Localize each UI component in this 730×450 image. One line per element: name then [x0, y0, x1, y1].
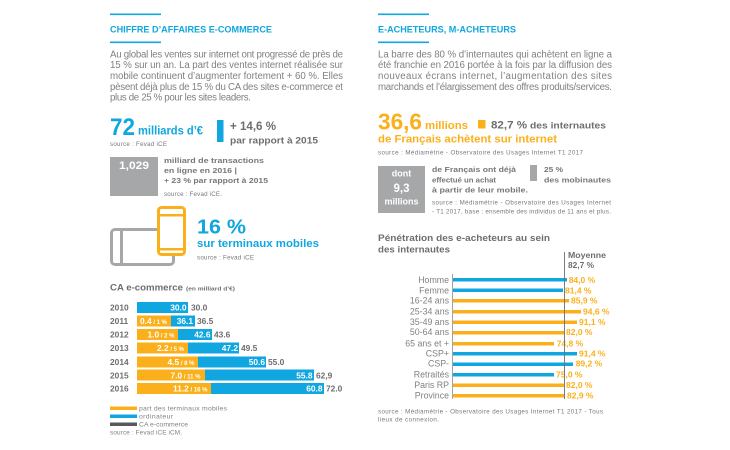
row CSP-: 89,2 % [576, 358, 603, 368]
row 2013: 49.5 [241, 343, 258, 353]
row 2011: 36.5 [197, 316, 214, 326]
stat: 16 % mobiles [197, 216, 319, 262]
row CSP+: 91,4 % [579, 348, 606, 358]
row CSP-: CSP- [428, 358, 449, 368]
row Paris RP: 82,0 % [566, 380, 593, 390]
icon: tablet and phone [112, 208, 185, 264]
stat: 72 milliards: source : Fevad iCE [110, 141, 167, 148]
row 2015: 62,9 [316, 370, 333, 380]
text: mobile buyers: - T1 2017, base : ensemble des individus de 11 ans et plus. [432, 208, 611, 216]
row 16-24 ans [410, 296, 598, 306]
intro text: La barre des 80 % d’internautes qui achètent en ligne a [378, 50, 613, 60]
stat: 16 % mobiles: sur terminaux mobiles [197, 238, 319, 250]
stat: growth 14,6 %: par rapport à 2015 [230, 136, 319, 146]
legend: source : Fevad iCE iCM. [110, 430, 182, 436]
row 2014: 55.0 [268, 357, 285, 367]
row 25-34 ans [410, 306, 610, 316]
row Retraités: 75,0 % [556, 370, 583, 380]
legend: ordinateur [139, 414, 174, 420]
chart title: CA e-commerce: CA e-commerce [110, 282, 183, 294]
row 2015: 7.0 / 11 % [170, 370, 201, 380]
row 2012: 42.6 [194, 330, 211, 340]
row Femme: Femme [419, 286, 449, 296]
row Province: Province [415, 390, 449, 400]
source note: source : Médiamétrie - Observatoire des Usages Internet T1 2017 - Tous [378, 408, 603, 416]
legend: part des terminaux mobiles [139, 406, 228, 412]
row Homme: Homme [418, 275, 449, 285]
intro text: marchands et l’élargissement des offres produits/services. [378, 82, 612, 93]
stat: 72 milliards [110, 114, 204, 148]
row 35-49 ans [410, 317, 606, 327]
row 2014: 2014 [110, 357, 129, 367]
row 2015: 2015 [110, 370, 129, 380]
row 50-64 ans: 50-64 ans [410, 327, 450, 337]
stat: dont 9,3 millions: millions [384, 196, 419, 206]
row Paris RP: Paris RP [414, 380, 449, 390]
stat: 72 milliards: milliards d’€ [138, 126, 204, 138]
stat: growth 14,6 % [217, 120, 319, 146]
row 2012: 43.6 [214, 330, 231, 340]
row 2016 [110, 383, 343, 394]
stat: 16 % mobiles: 16 % [197, 216, 246, 238]
row 2011: 2011 [110, 316, 129, 326]
row Province: 82,9 % [567, 390, 594, 400]
row CSP+ [426, 348, 606, 358]
row Homme: 84,0 % [569, 275, 596, 285]
row Retraités: Retraités [414, 370, 450, 380]
intro text: nouveaux écrans internet, l’augmentation des sites [378, 71, 612, 82]
stat: transactions: + 23 % par rapport à 2015 [164, 176, 269, 185]
stat: transactions: en ligne en 2016 | [164, 166, 237, 175]
bar chart: pénétration des e-acheteurs [405, 274, 610, 400]
row 2014: 4.5 / 8 % [168, 357, 195, 367]
chart title: pénétration: des internautes [378, 244, 450, 256]
row 35-49 ans: 91,1 % [579, 317, 606, 327]
legend [110, 406, 228, 436]
intro text [378, 50, 613, 93]
stat: 16 % mobiles: source : Fevad iCE [197, 254, 254, 262]
stat: 82,7 % des internautes: des internautes [530, 120, 606, 132]
stat: 25 % mobinautes: des mobinautes [544, 176, 611, 184]
stat: 72 milliards: 72 [110, 114, 135, 141]
intro text [110, 50, 344, 104]
chart title: pénétration: Pénétration des e-acheteurs au sein [378, 233, 550, 244]
row 2013: 2.2 / 5 % [157, 343, 185, 353]
chart title: CA e-commerce: (en milliard d’€) [186, 286, 235, 292]
stat: dont 9,3 millions [378, 166, 425, 213]
average marker: moyenne 82,7 %: Moyenne [568, 251, 607, 260]
average marker: moyenne 82,7 % [564, 251, 607, 399]
row 2013: 2013 [110, 343, 129, 353]
row 65 ans et +: 74,8 % [557, 338, 584, 348]
stat: 82,7 % des internautes [478, 120, 606, 132]
stat: transactions: milliard de transactions [164, 156, 264, 165]
row 2013: 47.2 [222, 343, 238, 353]
row 35-49 ans: 35-49 ans [410, 317, 450, 327]
stat: 36,6 millions: 36,6 [378, 108, 422, 134]
row CSP+: CSP+ [426, 348, 449, 358]
row Province [415, 390, 594, 400]
row 2012: 2012 [110, 330, 129, 340]
row 2015: 55.8 [296, 370, 313, 380]
row 25-34 ans: 25-34 ans [410, 306, 450, 316]
row 2014: 50.6 [249, 357, 265, 367]
row 16-24 ans: 16-24 ans [410, 296, 450, 306]
row Paris RP [414, 380, 593, 390]
row 2012: 1.0 / 2 % [148, 330, 175, 340]
row 2016: 60.8 [306, 384, 323, 394]
stat: growth 14,6 %: + 14,6 % [230, 121, 276, 133]
row 50-64 ans [410, 327, 593, 337]
row 2010: 2010 [110, 302, 129, 312]
row 2016: 2016 [110, 384, 129, 394]
source note: lieux de connexion. [378, 416, 439, 424]
intro text: plus de 25 % pour les sites leaders. [110, 92, 251, 104]
intro text: pèsent déjà plus de 15 % du CA des sites e-commerce et [110, 82, 343, 93]
stat: 82,7 % des internautes: 82,7 % [491, 120, 527, 132]
chart title: CA e-commerce [110, 282, 235, 294]
row 25-34 ans: 94,6 % [583, 306, 610, 316]
stat: transactions: source : Fevad iCE. [164, 191, 222, 198]
stat: 36,6 millions: source : Médiamétrie - Observatoire des Usages Internet T1 2017 [378, 150, 584, 156]
stat: 25 % mobinautes: 25 % [544, 165, 563, 174]
stat: 25 % mobinautes [530, 165, 611, 184]
intro text: été franchie en 2016 portée à la fois par la diffusion des [378, 60, 612, 71]
row Femme [419, 286, 592, 296]
row 65 ans et +: 65 ans et + [405, 338, 449, 348]
row Femme: 81,4 % [565, 286, 592, 296]
source note [378, 408, 603, 424]
text: mobile buyers: de Français ont déjà [432, 165, 517, 174]
row 2010: 30.0 [191, 302, 208, 312]
row 2011 [110, 316, 214, 326]
row 50-64 ans: 82,0 % [566, 327, 593, 337]
stat: transactions: 1,029 [119, 160, 149, 172]
row 2014 [110, 356, 285, 368]
row Homme [418, 275, 596, 285]
intro text: Au global les ventes sur internet ont progressé de près de [110, 50, 343, 60]
heading: chiffre d'affaires: CHIFFRE D’AFFAIRES E-COMMERCE [110, 24, 273, 36]
row Retraités [414, 370, 583, 380]
heading: e-acheteurs [378, 14, 517, 43]
intro text: 15 % sur un an. La part des ventes internet réalisée sur [110, 60, 344, 71]
row 2010 [110, 302, 208, 313]
row 2011: 0.4 / 1 % [140, 316, 168, 326]
row 2010: 30.0 [170, 302, 187, 312]
row 65 ans et + [405, 338, 584, 348]
text: mobile buyers: à partir de leur mobile. [432, 186, 528, 194]
chart title: pénétration [378, 233, 550, 256]
average marker: moyenne 82,7 %: 82,7 % [568, 261, 594, 270]
row 2015 [110, 370, 333, 380]
stat: 36,6 millions [378, 108, 584, 156]
stat: 36,6 millions: de Français achètent sur internet [378, 134, 558, 146]
stat: transactions [110, 156, 269, 198]
text: mobile buyers: effectué un achat [432, 176, 496, 184]
panel: chiffre d'affaires e-commerce [110, 14, 344, 436]
stat: 36,6 millions: millions [425, 120, 468, 132]
row 2013 [110, 342, 258, 354]
stat: dont 9,3 millions: 9,3 [394, 183, 410, 195]
text: mobile buyers [432, 165, 611, 216]
text: mobile buyers: source : Médiamétrie - Observatoire des Usages Internet [432, 200, 611, 206]
row 16-24 ans: 85,9 % [571, 296, 598, 306]
row 2011: 36.1 [177, 316, 193, 326]
stat: dont 9,3 millions: dont [392, 168, 411, 178]
legend: CA e-commerce [139, 422, 188, 428]
row CSP- [428, 358, 603, 368]
heading: e-acheteurs: E-ACHETEURS, M-ACHETEURS [378, 24, 517, 36]
row 2016: 72.0 [326, 384, 343, 394]
row 2016: 11.2 / 16 % [173, 384, 208, 394]
intro text: mobile continuent d’augmenter fortement + 60 %. Elles [110, 71, 343, 82]
panel: e-acheteurs, m-acheteurs [378, 14, 613, 424]
bar chart: CA e-commerce [110, 302, 343, 394]
row 2012 [110, 329, 231, 340]
